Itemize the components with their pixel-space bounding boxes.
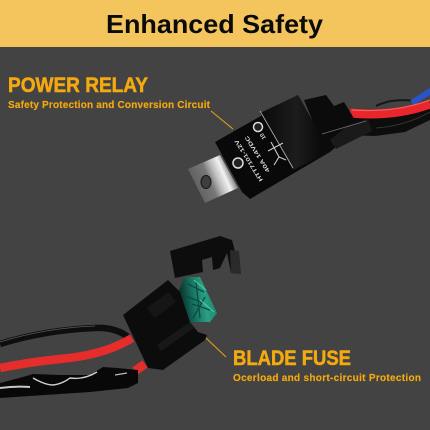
heading: blade fuse bbox=[233, 347, 421, 384]
subheading: power relay: Safety Protection and Conversion Circuit bbox=[8, 100, 211, 111]
heat shrink bbox=[0, 367, 138, 398]
relay label: 10 bbox=[259, 132, 268, 140]
relay connector bbox=[304, 95, 358, 152]
fuse holder cover bbox=[170, 236, 241, 278]
heading: power relay bbox=[8, 74, 211, 111]
relay body bbox=[215, 95, 330, 199]
subheading: blade fuse: Ocerload and short-circuit Protection bbox=[233, 373, 421, 384]
relay logo 1 bbox=[233, 158, 243, 168]
title: Enhanced Safety bbox=[106, 9, 324, 39]
relay label: 40A 14VDC bbox=[244, 134, 272, 173]
heading: blade fuse: BLADE FUSE bbox=[233, 347, 351, 370]
relay label: HTT7101-12V bbox=[234, 138, 265, 182]
title banner bbox=[0, 0, 430, 47]
relay bracket bbox=[188, 155, 238, 203]
relay wires bbox=[345, 90, 430, 136]
leader line: fuse bbox=[206, 338, 226, 357]
relay sleeve bbox=[322, 119, 372, 149]
relay label bbox=[234, 132, 272, 182]
relay circuit symbol bbox=[268, 142, 286, 165]
fuse holder body bbox=[123, 280, 207, 370]
relay logo 2 bbox=[254, 122, 262, 132]
fuse wires bbox=[0, 326, 145, 371]
blade fuse element bbox=[178, 277, 217, 322]
bracket hole bbox=[201, 176, 211, 188]
heading: power relay: POWER RELAY bbox=[8, 74, 148, 97]
leader line: relay bbox=[211, 111, 233, 129]
